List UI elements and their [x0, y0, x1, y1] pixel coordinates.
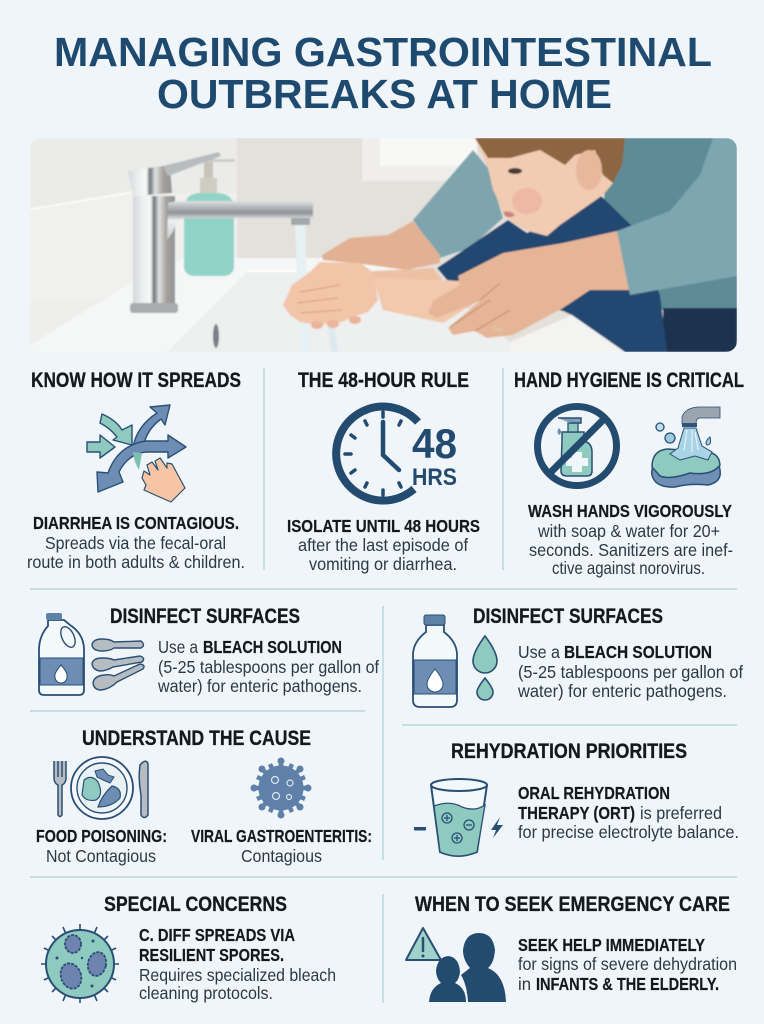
- text: oral rehydration therapy: THERAPY (ORT): [518, 803, 635, 823]
- panel: disinfect surfaces (left): [39, 605, 379, 696]
- text: c. diff spreads: Requires specialized bleach: [139, 965, 336, 985]
- text: oral rehydration therapy: [518, 783, 739, 842]
- heading: special concerns: SPECIAL CONCERNS: [104, 893, 287, 916]
- text: oral rehydration therapy: ORAL REHYDRATION: [518, 783, 670, 803]
- icon: no hand sanitizer: [538, 406, 616, 486]
- text: wash hands vigorously: with soap & water for 20+: [537, 521, 720, 541]
- text: viral gastroenteritis: Contagious: [241, 846, 322, 866]
- icon: water drops: [473, 636, 497, 700]
- text: diarrhea is contagious: DIARRHEA IS CONTAGIOUS.: [33, 513, 239, 533]
- adult torso: [600, 138, 737, 310]
- text: c. diff spreads: C. DIFF SPREADS VIA: [139, 925, 295, 945]
- text: seek help immediately: for signs of severe dehydration: [518, 954, 737, 974]
- text: bleach solution: Use a: [518, 642, 560, 662]
- child head: [475, 138, 625, 236]
- panel: know how it spreads: [27, 369, 245, 572]
- icon: tablespoons: [92, 639, 144, 690]
- text: viral gastroenteritis: VIRAL GASTROENTERITIS:: [191, 826, 372, 846]
- sink and counter: [30, 258, 420, 352]
- text: diarrhea is contagious: Spreads via the fecal-oral: [45, 533, 226, 553]
- text: food poisoning: FOOD POISONING:: [36, 826, 167, 846]
- heading: understand the cause: UNDERSTAND THE CAUSE: [82, 727, 311, 750]
- icon: running tap over soap sponge: [652, 407, 720, 487]
- text: bleach solution: Use a: [158, 637, 198, 657]
- text: seek help immediately: SEEK HELP IMMEDIATELY: [518, 935, 705, 955]
- icon: bleach jug: [39, 613, 84, 695]
- panel: the 48-hour rule: [287, 369, 480, 574]
- panel: disinfect surfaces (right): [413, 605, 743, 707]
- heading: know how it spreads: KNOW HOW IT SPREADS: [31, 369, 241, 392]
- text: bleach solution: water) for enteric pathogens.: [517, 681, 727, 701]
- icon: clock with 48 hrs: HRS: [412, 464, 457, 491]
- text: bleach solution: (5-25 tablespoons per gallon of: [518, 662, 743, 682]
- text: bleach solution: [517, 642, 743, 701]
- tap: [133, 196, 175, 305]
- text: oral rehydration therapy: is preferred: [640, 803, 722, 823]
- text: bleach solution: (5-25 tablespoons per gallon of: [158, 657, 379, 677]
- child shirt: [437, 195, 667, 352]
- heading: rehydration priorities: REHYDRATION PRIORITIES: [451, 740, 687, 763]
- icon: glass of electrolyte water: [414, 779, 503, 856]
- icon: virus: [251, 758, 311, 818]
- panel: special concerns: [41, 893, 336, 1003]
- text: isolate until 48 hours: ISOLATE UNTIL 48 HOURS: [287, 516, 480, 536]
- panel: understand the cause: [36, 727, 372, 866]
- icon: clock with 48 hrs: 48: [412, 420, 457, 467]
- text: oral rehydration therapy: for precise electrolyte balance.: [518, 822, 739, 842]
- icon: bottle: [413, 615, 457, 707]
- icon: warning triangle with adult and child: [406, 928, 506, 1002]
- text: wash hands vigorously: WASH HANDS VIGOROUSLY: [528, 501, 732, 521]
- text: isolate until 48 hours: after the last episode of: [298, 535, 468, 555]
- icon: spreading arrows and hand: [87, 405, 186, 502]
- child arms and hands: [373, 268, 443, 280]
- water: [295, 225, 310, 352]
- title: OUTBREAKS AT HOME: [157, 71, 612, 117]
- text: food poisoning: Not Contagious: [46, 846, 156, 866]
- heading: disinfect surfaces: DISINFECT SURFACES: [110, 605, 300, 628]
- text: bleach solution: BLEACH SOLUTION: [203, 637, 342, 657]
- text: isolate until 48 hours: [287, 516, 480, 574]
- adult front arm and sleeve: [428, 231, 632, 338]
- icon: clock with 48 hrs: [336, 407, 457, 501]
- text: wash hands vigorously: [528, 501, 733, 578]
- text: viral gastroenteritis: [191, 826, 372, 866]
- text: seek help immediately: INFANTS & THE ELDERLY.: [536, 974, 719, 994]
- adult back arm and hand: [322, 221, 440, 270]
- text: c. diff spreads: RESILIENT SPORES.: [139, 945, 284, 965]
- panel: rehydration priorities: [414, 740, 739, 856]
- panel: hand hygiene is critical: [514, 369, 744, 578]
- text: wash hands vigorously: ctive against norovirus.: [552, 558, 705, 578]
- icon: fork, plate and knife: [54, 757, 148, 819]
- soap bottle: [184, 193, 234, 276]
- text: c. diff spreads: [139, 925, 336, 1003]
- heading: the 48-hour rule: THE 48-HOUR RULE: [298, 369, 469, 392]
- text: wash hands vigorously: seconds. Sanitizers are inef-: [529, 540, 733, 560]
- text: bleach solution: water) for enteric pathogens.: [157, 676, 362, 696]
- text: food poisoning: [36, 826, 167, 866]
- text: isolate until 48 hours: vomiting or diarrhea.: [309, 554, 457, 574]
- adult back sleeve: [413, 150, 503, 258]
- icon: c. diff microbe: [41, 924, 119, 1003]
- text: seek help immediately: [518, 935, 737, 994]
- text: diarrhea is contagious: route in both adults & children.: [27, 552, 245, 572]
- photo: child washing hands with adult at sink: [30, 138, 737, 352]
- text: diarrhea is contagious: [27, 513, 245, 572]
- title: MANAGING GASTROINTESTINAL: [54, 29, 712, 75]
- panel: when to seek emergency care: [406, 893, 737, 1002]
- title: [54, 29, 712, 117]
- text: bleach solution: [157, 637, 379, 696]
- text: bleach solution: BLEACH SOLUTION: [564, 642, 712, 662]
- heading: disinfect surfaces: DISINFECT SURFACES: [473, 605, 663, 628]
- text: c. diff spreads: cleaning protocols.: [139, 983, 273, 1003]
- text: seek help immediately: in: [518, 974, 531, 994]
